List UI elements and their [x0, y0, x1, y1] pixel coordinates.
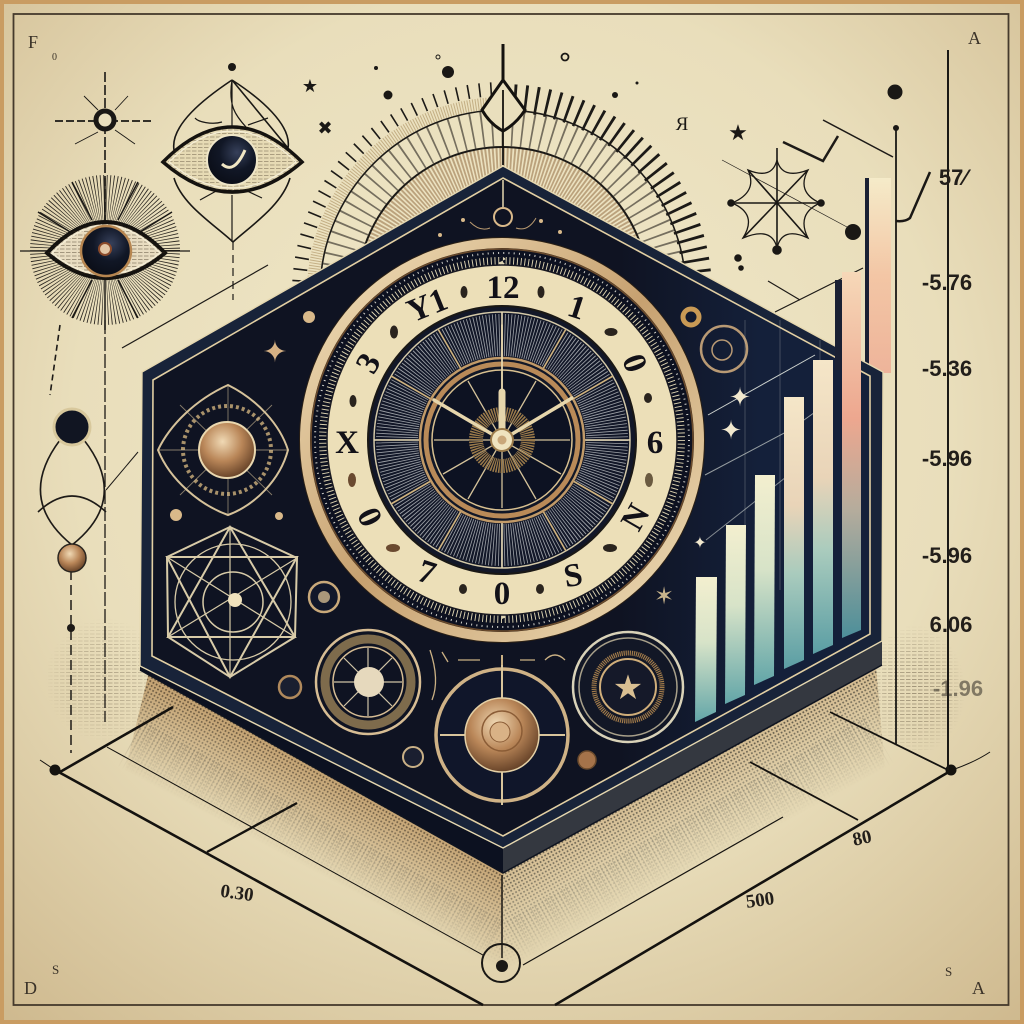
- axis labels: 57⁄: [939, 165, 971, 190]
- dial numerals: Y1: [402, 282, 453, 330]
- corner glyphs: F: [28, 32, 38, 52]
- icon: radiant eye: [20, 178, 190, 330]
- axis labels: -5.96: [922, 446, 972, 471]
- dial numerals: N: [614, 498, 657, 537]
- icon: web star: [728, 148, 824, 270]
- dial numerals: X: [335, 425, 359, 461]
- icon: small medallion: [309, 582, 339, 612]
- dial tick band: [323, 261, 681, 619]
- icon: caged eye: [163, 63, 302, 242]
- tallest bar behind the panel: [865, 178, 891, 373]
- icon: small bronze bead: [279, 676, 301, 698]
- iris: [81, 226, 131, 276]
- bar 3: [754, 475, 775, 685]
- crosshair node: [55, 72, 152, 230]
- hexagonal panel: [140, 166, 883, 873]
- right floor shading: [503, 655, 885, 975]
- left panel side: [140, 645, 503, 873]
- panel face rim: [140, 166, 883, 848]
- clock: [299, 237, 705, 643]
- hub: [491, 429, 513, 451]
- bar 2: [725, 525, 746, 704]
- bar 5: [813, 360, 833, 654]
- chart sky lines and sparkles: ✦: [720, 416, 742, 445]
- small stars and dots above the panel: [302, 54, 902, 240]
- dial numerals: 0: [614, 349, 654, 377]
- corner glyphs: 0: [52, 52, 57, 63]
- dial numerals: 0: [349, 502, 389, 533]
- corner glyphs: S: [52, 962, 59, 977]
- floor grid and stippled shading: [40, 610, 990, 1005]
- floor nodes: [50, 764, 60, 776]
- axis labels: -1.96: [933, 676, 983, 701]
- left floor shading: [125, 668, 503, 975]
- floor axis labels: 80: [851, 826, 874, 851]
- chart sky lines and sparkles: ✦: [693, 535, 707, 552]
- panel sprigs: [430, 650, 565, 700]
- chart sky lines and sparkles: ✶: [654, 584, 674, 610]
- cream numeral ring: [327, 265, 677, 615]
- axis lines: [894, 50, 948, 770]
- dial numerals: 3: [349, 347, 389, 380]
- dial numerals: S: [561, 557, 585, 595]
- dial numerals: 1: [563, 288, 590, 328]
- small stars and dots above the panel: ★: [302, 76, 318, 96]
- outer bezel: [299, 237, 705, 643]
- dial dot band: [315, 253, 689, 627]
- dial numerals: 7: [413, 553, 440, 593]
- floor axis labels: [219, 826, 874, 913]
- small stars and dots above the panel: ✖: [317, 118, 333, 138]
- disc spokes: [374, 312, 630, 568]
- center spokes: [434, 372, 570, 508]
- medallion: left gauge: [316, 630, 420, 734]
- corner glyphs: S: [945, 964, 952, 979]
- axis labels: -5.36: [922, 356, 972, 381]
- axis labels: -5.76: [922, 270, 972, 295]
- fine tick disc: [397, 335, 607, 545]
- medallion: right star: ★: [613, 670, 643, 707]
- right side hatch patch: [870, 630, 961, 750]
- medallion: upper sphere: [158, 385, 288, 515]
- pendant diagram: [38, 325, 138, 753]
- dial numerals: 12: [486, 270, 520, 306]
- dial numerals: 0: [494, 576, 510, 612]
- rays: [20, 178, 190, 330]
- pupil: [99, 243, 111, 255]
- dial numerals: 6: [647, 425, 663, 461]
- floor axis labels: 500: [744, 888, 776, 913]
- axis labels: 6.06: [930, 612, 972, 637]
- panel glints: ✦: [262, 336, 288, 369]
- gear: [476, 414, 528, 466]
- bar 6: [842, 272, 861, 638]
- medallion: sacred geometry: [167, 527, 297, 677]
- axis labels: -5.96: [922, 543, 972, 568]
- floor lines: [40, 707, 990, 1005]
- panel glints: [170, 180, 699, 682]
- sclera hatch: [47, 222, 165, 278]
- right panel side: [503, 641, 882, 873]
- chart sky lines and sparkles: [654, 320, 832, 620]
- right chart tint: [620, 241, 870, 772]
- gold inner rings: [420, 358, 584, 522]
- icon: small right bead: [578, 751, 596, 769]
- floor axis labels: 0.30: [219, 881, 255, 906]
- bar 1: [695, 577, 717, 722]
- medallion: right star: [573, 632, 683, 742]
- corner glyphs: A: [968, 28, 981, 48]
- left side hatch patch: [52, 626, 148, 736]
- eye highlight: [52, 226, 160, 274]
- panel gold inlay: [140, 166, 883, 873]
- floor bottom dial: [482, 875, 520, 982]
- dial numerals: [335, 270, 663, 612]
- eye shape: [47, 222, 165, 278]
- guide lines upper left and right: [105, 120, 893, 722]
- sunburst arc behind the panel: [299, 89, 698, 476]
- corner glyphs: A: [972, 978, 985, 998]
- bar 4: [784, 397, 804, 669]
- icon: small lower bead: [403, 747, 423, 767]
- chart sky lines and sparkles: ✦: [729, 383, 751, 412]
- small stars and dots above the panel: Я: [676, 114, 689, 135]
- bar chart: [695, 272, 861, 722]
- axis labels: [922, 165, 983, 701]
- small stars and dots above the panel: ★: [728, 120, 748, 145]
- medallion: center bronze knob: [436, 665, 568, 805]
- corner glyphs: D: [24, 978, 37, 998]
- right-hand axis: [894, 50, 983, 770]
- top finial and drop icon: [482, 44, 525, 165]
- hands: [434, 325, 572, 440]
- dial dots: [348, 286, 653, 594]
- panel face: [152, 178, 870, 836]
- icon: small knot ring: [701, 326, 747, 372]
- inner dark ring: [368, 306, 636, 574]
